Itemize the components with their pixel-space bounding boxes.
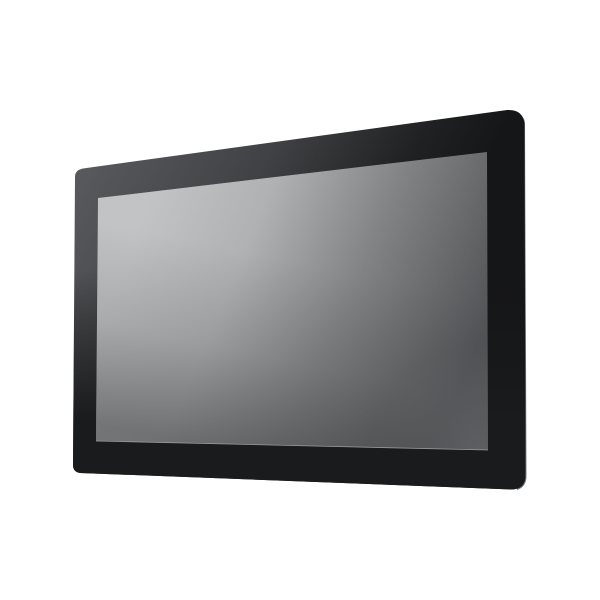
screen xyxy=(96,152,488,450)
monitor side edge xyxy=(515,113,526,490)
monitor bezel xyxy=(73,110,526,490)
